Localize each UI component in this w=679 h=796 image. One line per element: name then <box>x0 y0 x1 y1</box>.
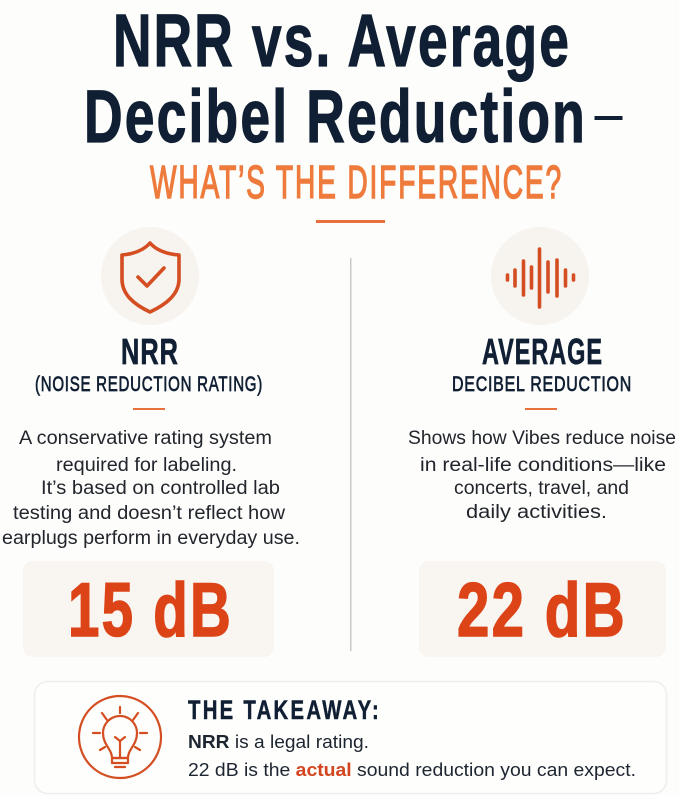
icon: shield <box>101 227 199 325</box>
center divider <box>350 258 352 651</box>
description: concerts, travel, and <box>454 478 629 499</box>
short divider <box>133 408 165 410</box>
short divider <box>525 408 557 410</box>
description: in real-life conditions—like <box>420 455 666 476</box>
takeaway heading: THE TAKEAWAY: <box>188 695 381 725</box>
panel: average decibel reduction <box>408 227 676 657</box>
description: A conservative rating system <box>19 428 272 449</box>
description: required for labeling. <box>56 455 237 476</box>
description: testing and doesn’t reflect how <box>13 503 285 524</box>
value card: 15 dB: 15 dB <box>68 568 233 653</box>
takeaway text: 22 dB is the actual sound reduction you can expect. <box>188 759 636 780</box>
panel: NRR <box>2 227 300 657</box>
heading: NRR: NRR <box>121 331 179 372</box>
heading: average: AVERAGE <box>482 331 603 372</box>
description <box>2 428 300 549</box>
description: Shows how Vibes reduce noise <box>408 428 676 449</box>
description <box>408 428 676 523</box>
description: earplugs perform in everyday use. <box>2 528 300 549</box>
icon: light bulb <box>79 696 161 778</box>
takeaway text: NRR is a legal rating. <box>188 731 369 752</box>
panel: takeaway <box>34 682 666 794</box>
takeaway text <box>188 731 636 780</box>
subheading: noise reduction rating: (NOISE REDUCTION RATING) <box>35 373 263 396</box>
subtitle divider <box>316 220 385 223</box>
icon: sound wave <box>491 227 589 325</box>
description: It’s based on controlled lab <box>41 478 280 499</box>
title <box>84 0 622 158</box>
value card: 22 dB: 22 dB <box>457 568 627 653</box>
description: daily activities. <box>466 502 607 523</box>
value card: 15 dB <box>23 561 274 657</box>
